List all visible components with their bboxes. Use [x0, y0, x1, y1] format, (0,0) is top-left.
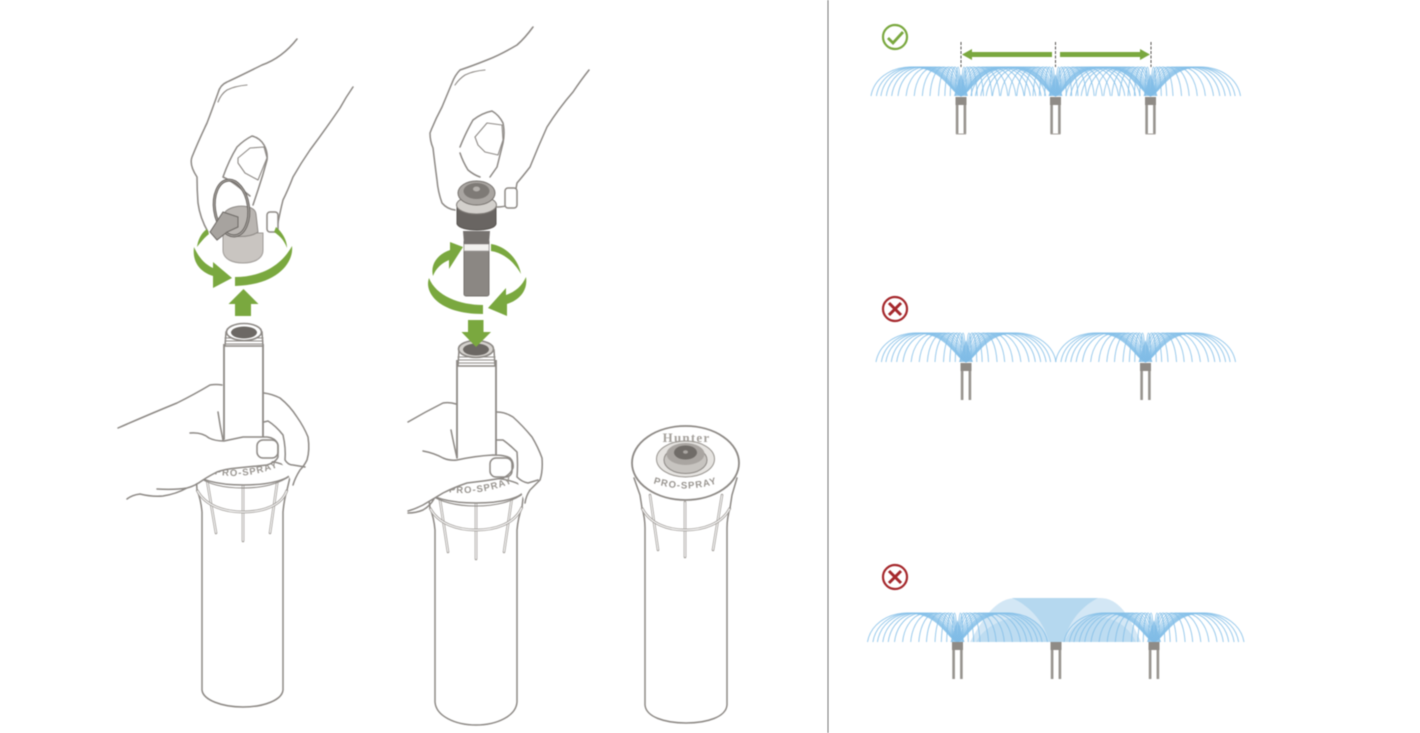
- sprinkler risers row 2: [960, 363, 1151, 400]
- label: PRO-SPRAY on collar: PRO-SPRAY: [214, 462, 276, 477]
- panel: obstructed spray: [868, 565, 1244, 679]
- down arrow 2: [462, 320, 491, 347]
- icon: red cross: [883, 297, 907, 321]
- panel: step 2 install nozzle: [406, 26, 590, 726]
- lower hand holding body 2: [408, 403, 542, 513]
- rotation arrows 1: [194, 227, 292, 288]
- riser pipe 2: [457, 340, 496, 460]
- flush cap with ring: [210, 178, 263, 263]
- lower hand holding body: [118, 384, 309, 499]
- sprinkler risers row 3: [952, 642, 1160, 679]
- upper hand with cap: [191, 39, 353, 232]
- cap top: [632, 426, 739, 500]
- icon: check mark: [883, 25, 907, 49]
- sprinkler body 3: [634, 478, 737, 723]
- sprinkler spray row 3: [868, 613, 1244, 642]
- label: PRO-SPRAY on collar: PRO-SPRAY: [449, 476, 510, 494]
- label: PRO-SPRAY on cap: PRO-SPRAY: [654, 476, 715, 490]
- panel: spacing too wide: [876, 297, 1236, 400]
- panel: step 1 remove flush cap: [116, 38, 354, 708]
- panel: correct spacing: [871, 25, 1240, 134]
- nozzle assembly: [456, 181, 496, 296]
- spacing arrows: [961, 42, 1151, 67]
- sprinkler body 1: [196, 459, 292, 707]
- up arrow 1: [228, 289, 258, 316]
- sprinkler spray row 1: [871, 67, 1240, 96]
- icon: red cross: [883, 565, 907, 589]
- sprinkler risers row 1: [956, 97, 1156, 134]
- divider between panels: [828, 0, 829, 733]
- nozzle top view: [656, 441, 714, 477]
- sprinkler body 2: [428, 477, 524, 725]
- rotation arrows 2: [428, 242, 526, 316]
- label: Hunter logo: Hunter: [663, 430, 710, 445]
- sprinkler spray row 2: [876, 333, 1236, 362]
- riser pipe 1: [224, 324, 263, 441]
- upper hand with nozzle: [430, 27, 589, 210]
- blocked spray dome: [970, 598, 1141, 642]
- panel: installed sprinkler: [630, 424, 740, 724]
